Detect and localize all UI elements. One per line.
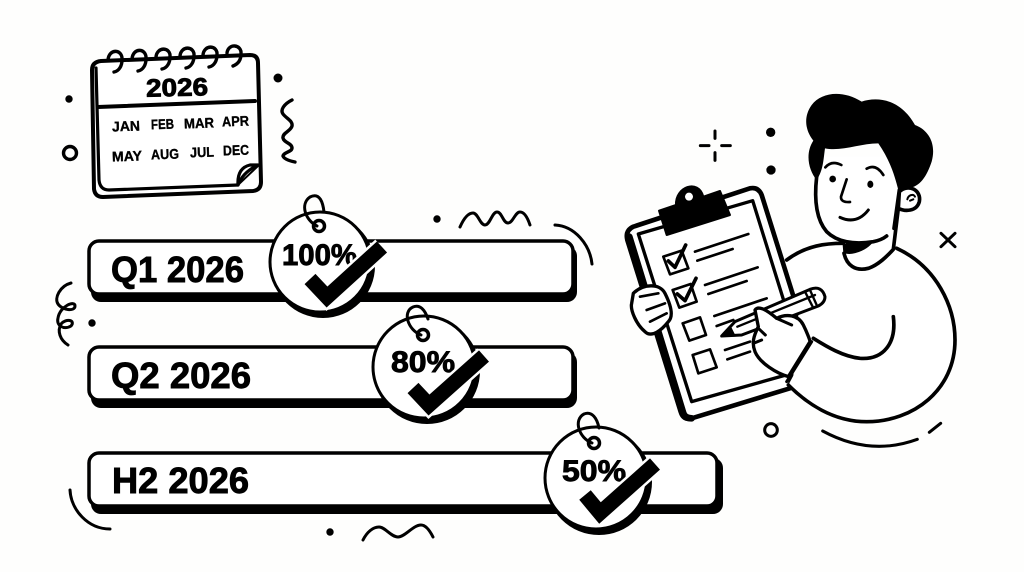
badge: 100% tag with check bbox=[270, 196, 382, 318]
calendar year: 2026 bbox=[146, 73, 208, 103]
sweater body bbox=[787, 243, 955, 422]
calendar months: JAN bbox=[112, 117, 140, 134]
hand holding pencil bbox=[753, 308, 810, 377]
calendar months: DEC bbox=[223, 142, 249, 158]
value: 100%: 100% bbox=[282, 239, 357, 272]
calendar months: MAR bbox=[184, 114, 214, 132]
calendar months: AUG bbox=[151, 146, 179, 162]
decorations: sparkle, dots and motion marks bbox=[700, 128, 955, 446]
calendar months: APR bbox=[222, 113, 249, 129]
badge: 80% tag with check bbox=[373, 306, 484, 424]
calendar months: MAY bbox=[112, 147, 143, 165]
calendar months: FEB bbox=[151, 116, 174, 132]
checkboxes bbox=[663, 245, 717, 373]
calendar months bbox=[112, 113, 249, 165]
hand gripping clipboard bbox=[631, 286, 671, 334]
label: H2 2026: H2 2026 bbox=[112, 460, 249, 501]
ear bbox=[898, 188, 920, 210]
illustration: person holding clipboard bbox=[627, 94, 955, 446]
clipboard bbox=[627, 186, 797, 419]
value: 80%: 80% bbox=[391, 346, 455, 379]
pencil bbox=[722, 288, 825, 336]
calendar binding rings bbox=[108, 46, 241, 72]
hair bbox=[806, 94, 933, 190]
calendar months: JUL bbox=[190, 144, 215, 160]
checklist item lines bbox=[695, 234, 767, 359]
decorations: doodles around progress bars bbox=[57, 212, 592, 540]
value: 50%: 50% bbox=[562, 455, 626, 488]
panel: H2 2026 progress bar bbox=[89, 453, 723, 514]
icon: wall calendar 2026 bbox=[92, 46, 261, 197]
panel: Q2 2026 progress bar bbox=[89, 347, 577, 408]
badge: 50% tag with check bbox=[545, 413, 655, 535]
label: Q1 2026: Q1 2026 bbox=[111, 249, 244, 290]
decorations: doodles around calendar bbox=[64, 74, 295, 162]
label: Q2 2026: Q2 2026 bbox=[111, 355, 251, 396]
panel: Q1 2026 progress bar bbox=[89, 241, 577, 302]
head and face bbox=[806, 94, 933, 269]
